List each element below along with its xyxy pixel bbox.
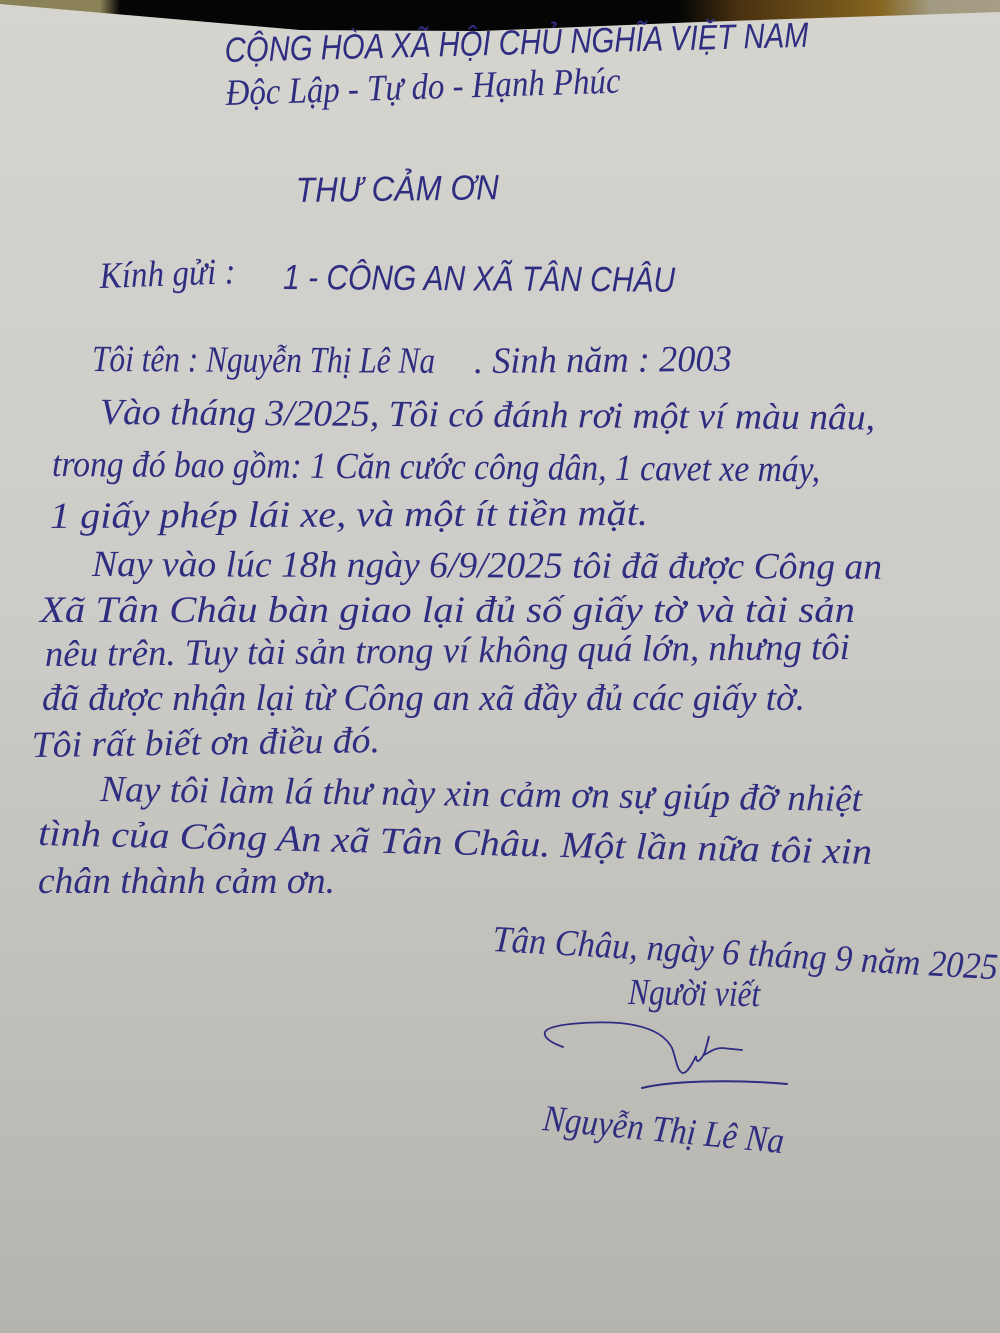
paragraph: returned documents: nêu trên. Tuy tài sản trong ví không quá lớn, nhưng tôi [45,627,850,675]
paragraph: thanks [38,769,873,902]
sender identity: . Sinh năm : 2003 [474,339,732,382]
recipient [98,251,676,300]
paragraph: returned documents: Nay vào lúc 18h ngày 6/9/2025 tôi đã được Công an [91,544,882,588]
title: THƯ CẢM ƠN [296,167,500,210]
signer name: Nguyễn Thị Lê Na [540,1098,786,1162]
paragraph: thanks: chân thành cảm ơn. [38,861,335,902]
writer label: Người viết [627,972,762,1015]
paragraph: returned documents: đã được nhận lại từ Công an xã đầy đủ các giấy tờ. [42,678,805,719]
sender identity [92,339,732,382]
national header: Độc Lập - Tự do - Hạnh Phúc [224,61,622,114]
sender identity: Tôi tên : Nguyễn Thị Lê Na [92,339,435,382]
national header [224,14,810,114]
paragraph: lost wallet: Vào tháng 3/2025, Tôi có đánh rơi một ví màu nâu, [100,392,875,438]
recipient: Kính gửi : [98,251,236,297]
paragraph: returned documents: Xã Tân Châu bàn giao lại đủ số giấy tờ và tài sản [38,590,855,631]
paragraph: lost wallet: trong đó bao gồm: 1 Căn cước công dân, 1 cavet xe máy, [52,444,820,490]
paragraph: returned documents: Tôi rất biết ơn điều đó. [32,720,380,766]
paragraph: returned documents [32,544,882,766]
paragraph: lost wallet [50,392,875,537]
background behind paper [0,0,1000,40]
paragraph: lost wallet: 1 giấy phép lái xe, và một ít tiền mặt. [50,493,648,537]
paragraph: thanks: tình của Công An xã Tân Châu. Một lần nữa tôi xin [38,813,873,873]
paragraph: thanks: Nay tôi làm lá thư này xin cảm ơn sự giúp đỡ nhiệt [99,769,864,820]
national header: CỘNG HÒA XÃ HỘI CHỦ NGHĨA VIỆT NAM [224,14,810,70]
signature [545,1022,787,1088]
recipient: 1 - CÔNG AN XÃ TÂN CHÂU [283,258,676,300]
